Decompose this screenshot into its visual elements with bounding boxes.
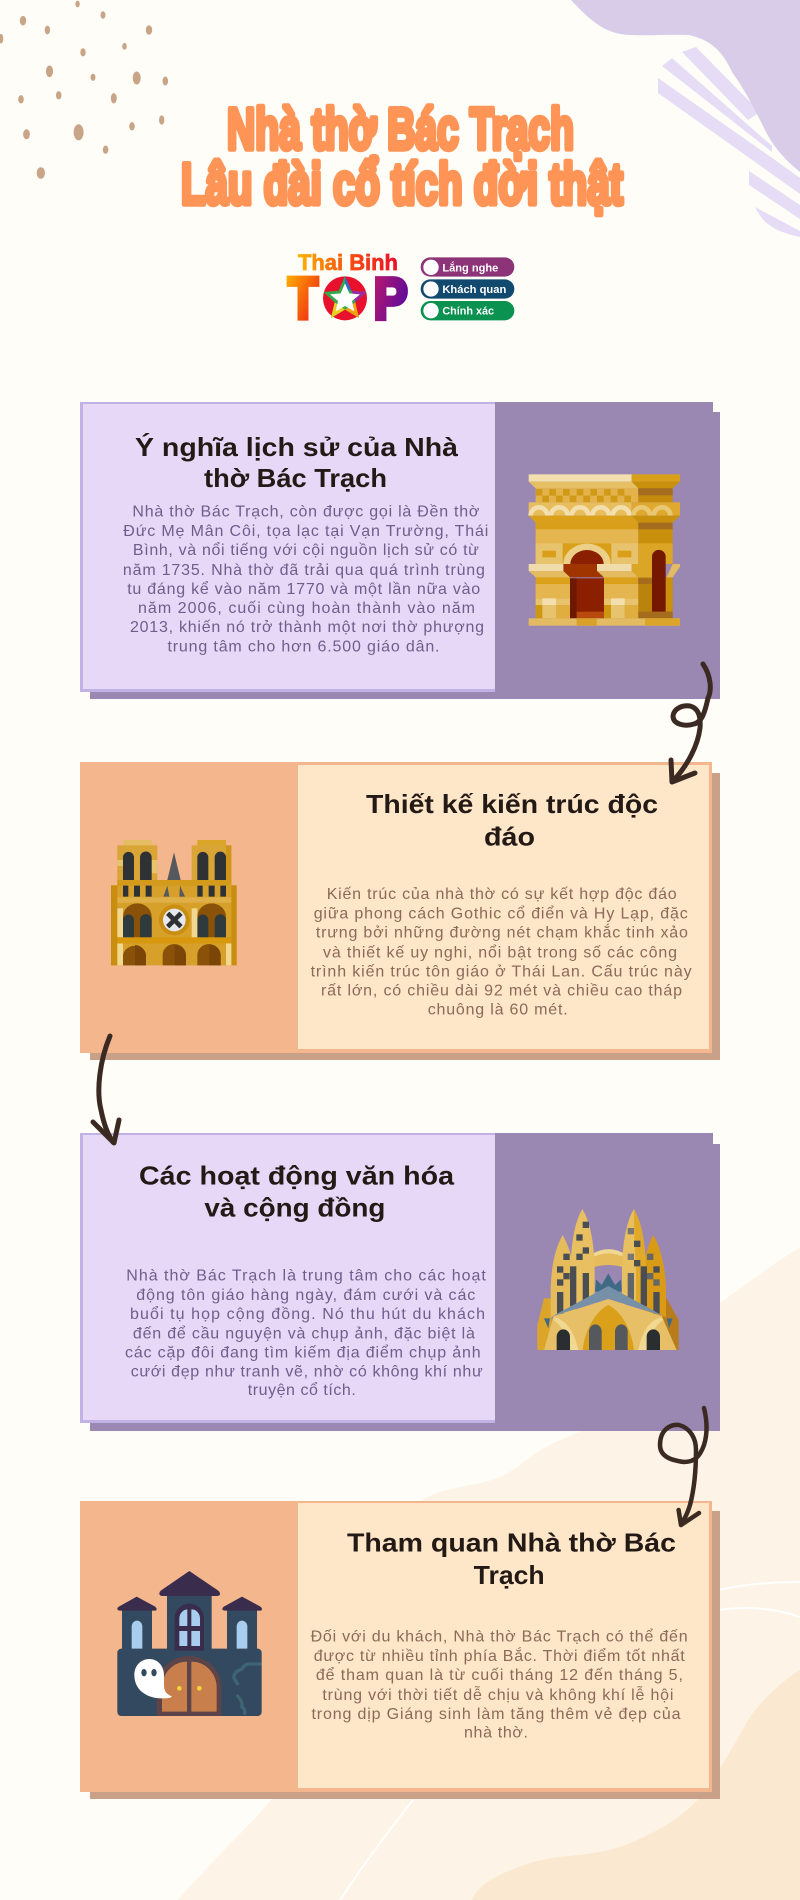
text block: Thiết kế kiến trúc: chuông là 60 mét. <box>428 1001 568 1018</box>
text block: Các hoạt động văn hóa: buổi tụ họp cộng đồng. Nó thu hút du khách <box>130 1305 485 1323</box>
text block: Thiết kế kiến trúc: trưng bởi những đường nét chạm khắc tinh xảo <box>316 922 688 941</box>
decorative dots <box>0 1 168 179</box>
text block: Các hoạt động văn hóa: động tôn giáo hàng ngày, đám cưới và các <box>136 1287 475 1304</box>
text block: Thiết kế kiến trúc: rất lớn, có chiều dài 92 mét và chiều cao tháp <box>321 983 682 1000</box>
background: bottom darker blob <box>472 1670 800 1900</box>
text block: Các hoạt động văn hóa: Nhà thờ Bác Trạch là trung tâm cho các hoạt <box>126 1268 486 1285</box>
panel: Tham quan <box>80 1501 720 1799</box>
heading: Thiết kế kiến trúc: đáo <box>484 822 535 852</box>
pill: Chính xác <box>421 301 514 320</box>
pill: Lắng nghe: Lắng nghe <box>442 262 498 275</box>
heading: Tham quan: Tham quan Nhà thờ Bác <box>347 1528 676 1558</box>
text block: Thiết kế kiến trúc: giữa phong cách Gothic cổ điển và Hy Lạp, đặc <box>314 904 688 922</box>
title <box>181 97 623 217</box>
text block: Các hoạt động văn hóa <box>125 1268 486 1399</box>
text block: Ý nghĩa lịch sử: năm 1735. Nhà thờ đã trải qua quá trình trùng <box>123 562 485 579</box>
text block: Các hoạt động văn hóa: đến để cầu nguyện và chụp ảnh, đặc biệt là <box>133 1324 475 1342</box>
icon: castle with ghost <box>117 1571 262 1716</box>
icon: basilica with spires <box>537 1209 679 1350</box>
text block: Tham quan: nhà thờ. <box>464 1725 528 1742</box>
text block: Thiết kế kiến trúc: trình kiến trúc tôn giáo ở Thái Lan. Cấu trúc này <box>311 964 692 981</box>
text block: Ý nghĩa lịch sử: 2013, khiến nó trở thành một nơi thờ phượng <box>130 619 484 636</box>
pill: Khách quan: Khách quan <box>442 284 507 296</box>
heading: Ý nghĩa lịch sử: Ý nghĩa lịch sử của Nhà <box>135 432 459 462</box>
background: top right blob <box>571 0 800 172</box>
text block: Tham quan: Đối với du khách, Nhà thờ Bác Trạch có thể đến <box>311 1628 688 1646</box>
panel: Các hoạt động văn hóa <box>80 1133 720 1431</box>
panel: Thiết kế kiến trúc <box>80 762 720 1060</box>
text block: Tham quan: trùng với thời tiết dễ chịu và không khí lễ hội <box>322 1685 673 1704</box>
heading: Các hoạt động văn hóa: và cộng đồng <box>204 1193 385 1223</box>
arrow: panel 3 to panel 4 <box>660 1408 707 1525</box>
text block: Các hoạt động văn hóa: truyện cổ tích. <box>248 1381 356 1399</box>
panel: Ý nghĩa lịch sử <box>80 402 720 699</box>
text block: Các hoạt động văn hóa: cưới đẹp như tranh vẽ, nhờ có không khí như <box>131 1364 483 1381</box>
arrow: panel 1 to panel 2 <box>671 664 710 782</box>
logo: Thai Binh TOP: T <box>288 267 318 332</box>
text block: Ý nghĩa lịch sử <box>123 504 488 656</box>
background: top right stripes <box>658 47 800 237</box>
icon: triumphal arch <box>529 474 680 626</box>
background: white curved lines <box>340 1582 800 1900</box>
text block: Thiết kế kiến trúc <box>311 886 692 1018</box>
text block: Ý nghĩa lịch sử: năm 2006, cuối cùng hoàn thành vào năm <box>138 600 475 617</box>
pill: Khách quan <box>421 279 514 299</box>
arrow: panel 2 to panel 3 <box>93 1036 119 1143</box>
text block: Tham quan <box>311 1628 688 1742</box>
text block: Thiết kế kiến trúc: Kiến trúc của nhà thờ có sự kết hợp độc đáo <box>327 886 677 903</box>
text block: Tham quan: trong dịp Giáng sinh làm tăng thêm vẻ đẹp của <box>312 1706 681 1723</box>
heading: Tham quan <box>347 1528 676 1590</box>
title: Nhà thờ Bác Trạch <box>227 97 574 162</box>
text block: Tham quan: được từ nhiều tỉnh phía Bắc. Thời điểm tốt nhất <box>314 1646 685 1665</box>
text block: Các hoạt động văn hóa: các cặp đôi đang tìm kiếm địa điểm chụp ảnh <box>125 1343 481 1361</box>
heading: Thiết kế kiến trúc <box>366 789 658 852</box>
icon: gothic cathedral <box>111 840 237 965</box>
heading: Thiết kế kiến trúc: Thiết kế kiến trúc độc <box>366 789 658 819</box>
text block: Tham quan: để tham quan là từ cuối tháng 12 đến tháng 5, <box>316 1666 683 1684</box>
text block: Thiết kế kiến trúc: và thiết kế uy nghi, nổi bật trong số các công <box>323 943 677 961</box>
text block: Ý nghĩa lịch sử: Bình, và nổi tiếng với cội nguồn lịch sử có từ <box>133 541 479 559</box>
logo: Thai Binh TOP <box>288 250 514 332</box>
pill: Chính xác: Chính xác <box>442 306 494 318</box>
text block: Ý nghĩa lịch sử: Nhà thờ Bác Trạch, còn được gọi là Đền thờ <box>132 504 480 521</box>
heading: Ý nghĩa lịch sử <box>135 432 459 493</box>
heading: Các hoạt động văn hóa <box>139 1160 455 1223</box>
heading: Các hoạt động văn hóa: Các hoạt động văn hóa <box>139 1160 455 1190</box>
text block: Ý nghĩa lịch sử: Đức Mẹ Mân Côi, tọa lạc tại Vạn Trường, Thái <box>123 523 488 540</box>
text block: Ý nghĩa lịch sử: trung tâm cho hơn 6.500 giáo dân. <box>168 639 440 656</box>
heading: Tham quan: Trạch <box>474 1560 545 1590</box>
title: Lâu đài cổ tích đời thật <box>181 152 623 217</box>
logo: Thai Binh TOP: P <box>374 267 408 332</box>
text block: Ý nghĩa lịch sử: tu đáng kể vào năm 1770 và một lần nữa vào <box>127 580 480 598</box>
logo: Thai Binh TOP: Thai Binh <box>298 250 398 275</box>
background: bottom light blob <box>178 1248 800 1900</box>
pill: Lắng nghe <box>421 257 514 277</box>
heading: Ý nghĩa lịch sử: thờ Bác Trạch <box>204 463 387 493</box>
